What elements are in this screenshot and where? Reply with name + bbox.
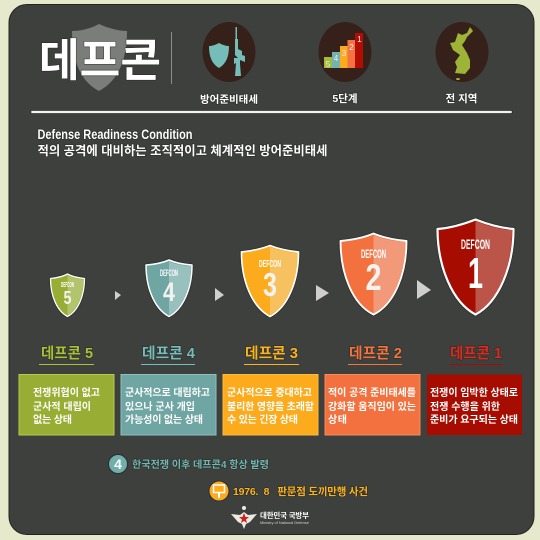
card: DEFCON 3: 군사적으로 중대하고 — [227, 386, 312, 399]
icon: five-step bars: 4 — [334, 54, 339, 63]
shield: DEFCON 2 — [340, 234, 406, 314]
heading: 데프콘 4: 데프콘 4 — [142, 345, 196, 362]
label: 5단계: 5단계 — [332, 92, 358, 105]
card: DEFCON 1: 전쟁 수행을 위한 — [430, 400, 500, 413]
card: DEFCON 4 — [121, 374, 216, 435]
shield: DEFCON 4: DEFCON — [160, 268, 178, 279]
card: DEFCON 2: 적이 공격 준비태세를 — [328, 386, 416, 399]
card: DEFCON 5: 군사적 대립이 — [33, 400, 91, 413]
card: DEFCON 3: 불리한 영향을 초래할 — [227, 400, 314, 413]
shield: DEFCON 4: 4 — [163, 277, 175, 307]
timeline item: 1976 axe murder incident: 1976. 8 판문점 도끼만행 사건 — [233, 485, 368, 498]
timeline item: 1976 axe murder incident — [209, 481, 368, 501]
title: 데프콘 with shield: 데프콘 — [39, 35, 161, 86]
shield: DEFCON 3: DEFCON — [259, 258, 281, 270]
icon: five-step bars: 2 — [349, 43, 354, 52]
heading: 데프콘 2: 데프콘 2 — [349, 345, 402, 362]
card: DEFCON 5: 없는 상태 — [33, 413, 72, 426]
label: 전 지역: 전 지역 — [446, 92, 477, 105]
card: DEFCON 2 — [325, 374, 420, 435]
arrow — [316, 285, 329, 301]
card: DEFCON 2: 상태 — [328, 413, 347, 426]
heading: 데프콘 1: 데프콘 1 — [450, 345, 502, 362]
shield: DEFCON 5 — [50, 274, 84, 316]
shield: DEFCON 2: 2 — [366, 257, 382, 298]
card: DEFCON 1: 전쟁이 임박한 상태로 — [430, 386, 518, 399]
icon: Korean peninsula — [436, 22, 488, 82]
arrow — [417, 280, 431, 299]
heading: 데프콘 5: 데프콘 5 — [41, 345, 93, 362]
shield: DEFCON 1: DEFCON — [461, 236, 490, 252]
heading: 데프콘 3: 데프콘 3 — [245, 345, 298, 362]
logo: Ministry of National Defense: 대한민국 국방부 — [260, 510, 309, 520]
shield: DEFCON 1: 1 — [468, 249, 483, 298]
card: DEFCON 5 — [19, 374, 114, 435]
card: DEFCON 2: 강화할 움직임이 있는 — [328, 400, 416, 413]
card: DEFCON 1 — [427, 374, 522, 435]
card: DEFCON 1: 준비가 요구되는 상태 — [430, 413, 518, 426]
shield: DEFCON 3 — [242, 246, 298, 316]
icon: five-step bars: 3 — [342, 49, 347, 58]
arrow — [215, 288, 224, 301]
icon: five-step bars — [318, 22, 372, 82]
card: DEFCON 4: 가능성이 없는 상태 — [125, 413, 203, 426]
timeline item: DEFCON 4 since Korean War: 한국전쟁 이후 데프콘4 항상 발령 — [132, 458, 269, 471]
divider line — [171, 32, 172, 84]
text: definition — [38, 127, 328, 158]
card: DEFCON 3: 수 있는 긴장 상태 — [227, 413, 298, 426]
timeline item: DEFCON 4 since Korean War — [108, 454, 269, 474]
logo: Ministry of National Defense: Ministry of National Defense — [260, 520, 310, 525]
shield: DEFCON 1 — [438, 220, 514, 314]
icon: five-step bars: 5 — [326, 60, 331, 69]
shield: DEFCON 5: DEFCON — [61, 282, 74, 289]
icon: five-step bars: 1 — [357, 35, 362, 44]
card: DEFCON 4: 있으나 군사 개입 — [125, 400, 195, 413]
card: DEFCON 5: 전쟁위협이 없고 — [33, 386, 100, 399]
text: definition: Defense Readiness Condition — [38, 127, 192, 142]
card: DEFCON 4: 군사적으로 대립하고 — [125, 386, 210, 399]
shield: DEFCON 3: 3 — [263, 266, 277, 303]
logo: Ministry of National Defense — [231, 506, 310, 529]
text: definition: 적의 공격에 대비하는 조직적이고 체계적인 방어준비태세 — [38, 143, 328, 158]
timeline item: DEFCON 4 since Korean War: 4 — [114, 456, 122, 472]
icon: shield and rifle — [202, 22, 256, 82]
shield: DEFCON 2: DEFCON — [361, 247, 386, 261]
card: DEFCON 3 — [223, 374, 318, 435]
shield: DEFCON 5: 5 — [64, 288, 72, 308]
label: 방어준비태세: 방어준비태세 — [200, 93, 258, 106]
shield: DEFCON 4 — [146, 260, 192, 316]
arrow — [115, 291, 121, 300]
